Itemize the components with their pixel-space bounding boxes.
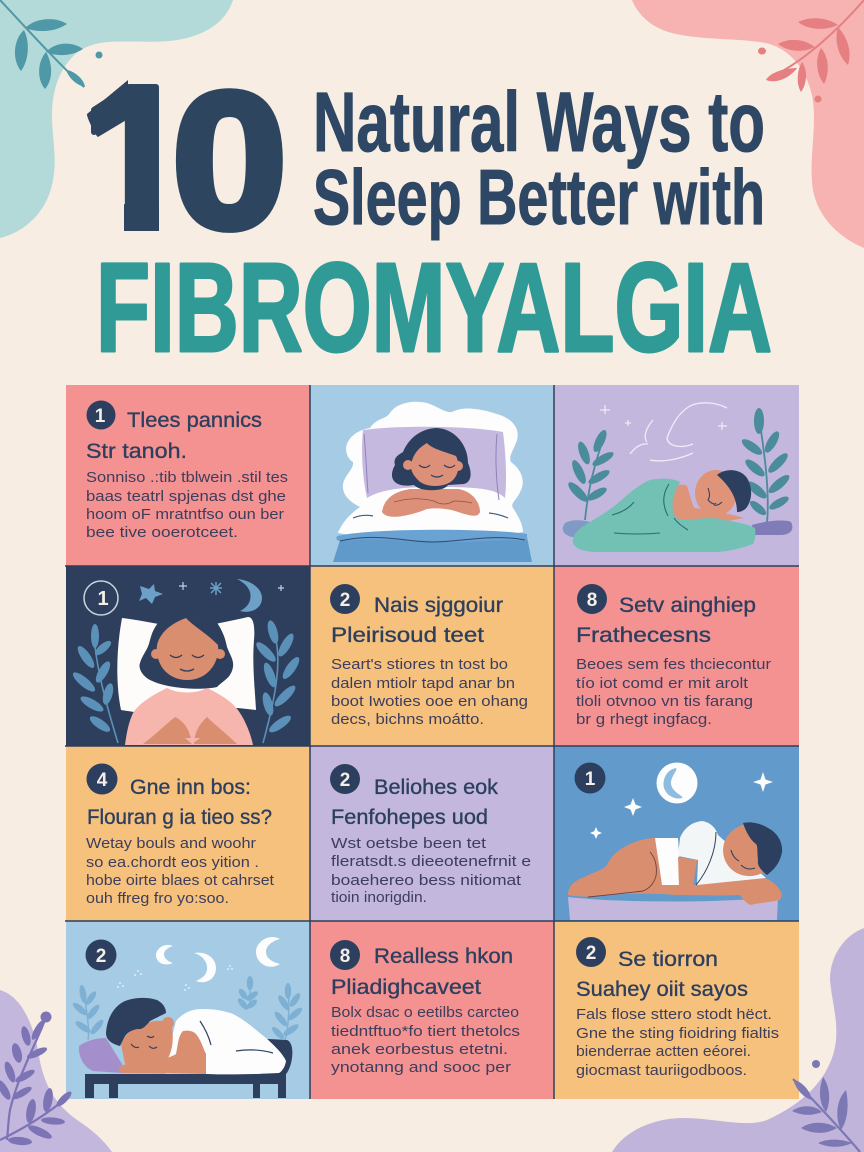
heading: Se tiorron xyxy=(618,948,718,971)
arm xyxy=(670,485,744,521)
number badge: 2 xyxy=(586,943,596,964)
body text: tiedntftuo*fo tiert thetolcs xyxy=(331,1024,520,1040)
star and moon xyxy=(139,579,284,612)
hair xyxy=(392,428,471,490)
panel: tip row 1 col 1 xyxy=(66,385,310,566)
number badge: 4 xyxy=(97,770,108,791)
panel: illustration woman on navy background xyxy=(66,566,310,746)
bed xyxy=(568,897,778,920)
number badge: 1 xyxy=(97,588,109,610)
title number: 10 xyxy=(86,80,283,233)
plant right xyxy=(740,408,792,523)
leaf sprigs xyxy=(70,619,302,743)
heading xyxy=(331,594,503,647)
body text: tío iot comd er mit arolt xyxy=(576,676,748,692)
heading: Nais sjggoiur xyxy=(374,594,503,617)
body text: Bolx dsac o eetilbs carcteo xyxy=(331,1005,519,1021)
heading xyxy=(331,945,513,999)
number badge xyxy=(330,584,360,614)
number badge: 8 xyxy=(587,590,597,611)
body text: giocmast tauriigodboos. xyxy=(576,1063,747,1079)
icon: purple leaf sprig bottom right xyxy=(792,1060,860,1152)
leaf sprigs xyxy=(71,976,304,1041)
heading xyxy=(87,776,272,829)
body text: Gne the sting fioidring fialtis xyxy=(576,1026,779,1042)
face xyxy=(411,443,458,486)
heading xyxy=(576,594,756,647)
decorative blob: top left teal corner xyxy=(0,0,233,238)
pillow ends xyxy=(563,520,792,537)
white quilt xyxy=(338,488,523,540)
hair xyxy=(743,822,782,875)
number badge xyxy=(84,581,118,615)
icon: purple leaf sprig bottom left xyxy=(0,1012,74,1146)
pillow xyxy=(79,1038,122,1073)
number badge xyxy=(86,400,116,430)
body text xyxy=(86,470,288,541)
body text xyxy=(331,1005,520,1076)
blue blanket xyxy=(333,537,532,562)
panel: illustration child sleeping on bench xyxy=(66,921,310,1099)
body text: decs, bichns moátto. xyxy=(331,712,484,728)
body text xyxy=(331,657,528,728)
hair xyxy=(106,998,166,1046)
head xyxy=(695,470,737,516)
hair xyxy=(717,470,751,512)
sparkle dots xyxy=(117,965,233,991)
body text: Beoes sem fes thciecontur xyxy=(576,657,771,673)
arm xyxy=(119,1031,206,1074)
heading xyxy=(576,948,748,1001)
body text: Seart's stiores tn tost bo xyxy=(331,657,508,673)
panel grid xyxy=(66,385,799,1099)
body text: boaehereo bess nitiomat xyxy=(331,873,521,889)
stars xyxy=(590,772,773,839)
face xyxy=(157,618,218,680)
body text: Wetay bouls and woohr xyxy=(86,836,256,852)
lilac pillow xyxy=(362,427,506,498)
number badge xyxy=(576,937,606,967)
plant left xyxy=(566,428,615,520)
heading: Suahey oiit sayos xyxy=(576,978,748,1001)
body text: br g rhegt ingfacg. xyxy=(576,712,712,728)
teal blanket xyxy=(573,479,755,552)
hair back xyxy=(139,608,233,689)
title number: 10: 0 xyxy=(172,52,287,268)
heading: Str tanoh. xyxy=(86,440,187,463)
body text: Wst oetsbe been tet xyxy=(331,836,486,852)
panel: tip row 3 col 1 xyxy=(66,746,310,921)
number badge xyxy=(86,764,118,794)
body text: hoom oF mratntfso oun ber xyxy=(86,507,284,523)
heading: Flouran g ia tieo ss? xyxy=(87,806,272,829)
head xyxy=(717,818,783,882)
body text: bienderrae actten eéorei. xyxy=(576,1044,751,1060)
body text xyxy=(331,836,531,906)
body text xyxy=(576,1007,779,1079)
body text: ouh ffreg fro yo:soo. xyxy=(86,891,229,907)
body text: ynotanng and sooc per xyxy=(331,1060,511,1076)
number badge: 2 xyxy=(340,770,350,791)
body text: so ea.chordt eos yition . xyxy=(86,855,259,871)
heading: Gne inn bos: xyxy=(130,776,251,799)
number badge xyxy=(574,762,606,794)
panel: tip row 4 col 3 xyxy=(554,921,799,1099)
body text xyxy=(86,836,274,907)
heading: Realless hkon xyxy=(374,945,513,968)
heading: Tlees pannics xyxy=(127,409,262,432)
arms xyxy=(382,489,480,517)
breath swirls and sparkles xyxy=(600,403,727,461)
moons xyxy=(156,937,280,982)
arm xyxy=(678,857,697,887)
number badge xyxy=(577,584,607,614)
number badge: 1 xyxy=(95,406,106,427)
moon xyxy=(656,762,698,804)
body text: tioin inorigdin. xyxy=(331,890,427,906)
title number: 10: 1 xyxy=(80,43,194,272)
heading: Pliadighcaveet xyxy=(331,976,481,999)
hands xyxy=(143,717,237,744)
number badge: 2 xyxy=(96,946,106,967)
heading: Frathecesns xyxy=(576,624,711,647)
number badge xyxy=(330,940,360,970)
body text: Fals flose sttero stodt hëct. xyxy=(576,1007,772,1023)
body text xyxy=(576,657,771,728)
body text: hobe oirte blaes ot cahrset xyxy=(86,873,274,889)
number badge xyxy=(86,940,116,970)
number badge: 8 xyxy=(340,946,350,967)
panel: illustration woman sleeping on pillow xyxy=(310,385,554,566)
number badge: 1 xyxy=(585,769,596,790)
body text: baas teatrl spjenas dst ghe xyxy=(86,489,286,505)
heading: Setv ainghiep xyxy=(619,594,756,617)
heading: Fenfohepes uod xyxy=(331,806,488,829)
title xyxy=(86,80,771,354)
panel: tip row 3 col 2 xyxy=(310,746,554,921)
white blanket xyxy=(166,1009,286,1074)
pillow xyxy=(117,617,256,712)
body text: tloli otvnoo vn tis farang xyxy=(576,694,753,710)
icon: teal leaf sprig xyxy=(0,0,102,89)
panel: illustration person sleeping under teal blanket xyxy=(554,385,799,566)
number badge xyxy=(330,764,360,794)
decorative blob: bottom right lilac corner xyxy=(612,928,864,1152)
body text: Sonniso .:tib tblwein .stil tes xyxy=(86,470,288,486)
body text: boot Iwoties ooe en ohang xyxy=(331,694,528,710)
panel: tip row 2 col 3 xyxy=(554,566,799,746)
panel: tip row 2 col 2 xyxy=(310,566,554,746)
body xyxy=(568,838,782,905)
icon: coral leaf sprig xyxy=(758,0,864,102)
shirt xyxy=(678,821,766,885)
heading xyxy=(86,409,262,463)
face xyxy=(121,1021,173,1064)
white shorts xyxy=(655,838,681,885)
heading: Beliohes eok xyxy=(374,776,499,799)
bed frame xyxy=(260,1039,292,1074)
panel: tip row 4 col 2 xyxy=(310,921,554,1099)
body text: anek eorbestus etetni. xyxy=(331,1042,508,1058)
number badge: 2 xyxy=(340,590,350,611)
heading: Pleirisoud teet xyxy=(331,624,484,647)
panel: illustration person on bed under moon xyxy=(554,746,799,921)
decorative blob: top right pink corner xyxy=(632,0,864,248)
decorative blob: bottom left lilac corner xyxy=(0,990,112,1152)
body text: fleratsdt.s dieeotenefrnit e xyxy=(331,854,531,870)
body text: dalen mtiolr tapd anar bn xyxy=(331,676,515,692)
body text: bee tive ooerotceet. xyxy=(86,525,238,541)
heading xyxy=(331,776,499,829)
pink shirt xyxy=(125,688,253,745)
white cloud xyxy=(338,402,523,532)
